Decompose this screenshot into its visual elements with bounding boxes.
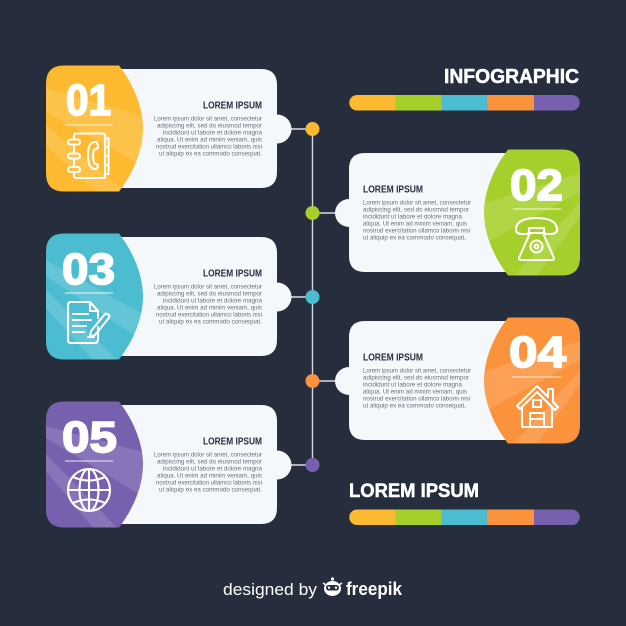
- panel: step 05: [46, 402, 292, 528]
- body text: [363, 200, 471, 242]
- timeline node 05: [306, 458, 320, 472]
- card body: [110, 69, 292, 188]
- icon: address book: [68, 134, 108, 178]
- icon: document with pen: [68, 302, 109, 343]
- footer credit: freepik: [346, 579, 403, 599]
- icon: freepik mascot: [323, 577, 342, 596]
- colour tab: [46, 234, 143, 360]
- number: 03: [62, 245, 115, 294]
- icon: telephone: [516, 218, 557, 260]
- heading: LOREM IPSUM: [203, 101, 262, 112]
- body text: adipiscing elit, sed do eiusmod tempor: [157, 122, 262, 130]
- body text: aliqua. Ut enim ad minim veniam, quis: [157, 305, 262, 312]
- timeline connector: [285, 129, 340, 465]
- colour tab: [46, 66, 143, 192]
- body text: ut aliquip ex ea commodo consequat.: [159, 319, 262, 326]
- panel: step 02: [335, 145, 588, 280]
- body text: adipiscing elit, sed do eiusmod tempor: [157, 458, 262, 466]
- body text: nostrud exercitation ullamco laboris nisi: [156, 480, 262, 487]
- icon: globe: [68, 469, 110, 511]
- body text: nostrud exercitation ullamco laboris nisi: [363, 396, 470, 403]
- divider: [65, 460, 113, 462]
- body text: Lorem ipsum dolor sit amet, consectetur: [363, 368, 471, 374]
- card body: [335, 321, 520, 440]
- body text: nostrud exercitation ullamco laboris nisi: [156, 312, 262, 319]
- body text: incididunt ut labore et dolore magna: [163, 298, 263, 305]
- body text: ut aliquip ex ea commodo consequat.: [159, 151, 262, 158]
- footer credit: [223, 577, 403, 599]
- body text: ut aliquip ex ea commodo consequat.: [363, 403, 466, 410]
- divider: [513, 208, 561, 210]
- card body: [110, 405, 292, 524]
- colour tab: [484, 150, 580, 276]
- number: 02: [510, 161, 563, 210]
- heading: LOREM IPSUM: [203, 269, 262, 280]
- body text: adipiscing elit, sed do eiusmod tempor: [157, 290, 262, 298]
- body text: nostrud exercitation ullamco laboris nisi: [156, 144, 262, 151]
- icon: house: [517, 386, 558, 427]
- card body: [335, 153, 520, 272]
- colour tab: [46, 402, 143, 528]
- body text: adipiscing elit, sed do eiusmod tempor: [363, 206, 469, 214]
- divider: [512, 376, 561, 378]
- body text: Lorem ipsum dolor sit amet, consectetur: [363, 200, 471, 206]
- body text: aliqua. Ut enim ad minim veniam, quis: [157, 137, 262, 144]
- body text: [154, 284, 263, 326]
- body text: adipiscing elit, sed do eiusmod tempor: [363, 374, 469, 382]
- body text: Lorem ipsum dolor sit amet, consectetur: [154, 452, 262, 458]
- body text: [363, 368, 471, 410]
- heading: LOREM IPSUM: [363, 353, 423, 364]
- subheading: LOREM IPSUM: [349, 480, 479, 502]
- panel: step 03: [46, 234, 292, 360]
- heading: LOREM IPSUM: [363, 185, 423, 196]
- body text: [154, 452, 263, 494]
- timeline node 03: [306, 290, 320, 304]
- number: 04: [509, 328, 567, 377]
- heading: LOREM IPSUM: [203, 437, 262, 448]
- body text: [154, 116, 263, 158]
- colour tab: [484, 318, 580, 444]
- panel: step 01: [46, 66, 292, 192]
- bottom colour bar: [349, 510, 580, 525]
- card body: [110, 237, 292, 356]
- number: 05: [62, 413, 117, 462]
- body text: incididunt ut labore et dolore magna: [363, 382, 463, 389]
- timeline node 01: [306, 122, 320, 136]
- panel: step 04: [335, 313, 588, 448]
- divider: [65, 124, 113, 126]
- number: 01: [66, 76, 111, 125]
- body text: aliqua. Ut enim ad minim veniam, quis: [157, 473, 262, 480]
- body text: incididunt ut labore et dolore magna: [163, 466, 263, 473]
- body text: aliqua. Ut enim ad minim veniam, quis: [363, 389, 467, 396]
- body text: Lorem ipsum dolor sit amet, consectetur: [154, 116, 262, 122]
- body text: Lorem ipsum dolor sit amet, consectetur: [154, 284, 262, 290]
- body text: ut aliquip ex ea commodo consequat.: [363, 235, 466, 242]
- title: INFOGRAPHIC: [444, 66, 579, 88]
- body text: nostrud exercitation ullamco laboris nisi: [363, 228, 470, 235]
- top colour bar: [349, 95, 580, 110]
- body text: incididunt ut labore et dolore magna: [163, 130, 263, 137]
- footer credit: designed by: [223, 580, 318, 599]
- body text: incididunt ut labore et dolore magna: [363, 214, 463, 221]
- timeline node 02: [306, 206, 320, 220]
- body text: aliqua. Ut enim ad minim veniam, quis: [363, 221, 467, 228]
- timeline node 04: [306, 374, 320, 388]
- divider: [65, 292, 113, 294]
- body text: ut aliquip ex ea commodo consequat.: [159, 487, 262, 494]
